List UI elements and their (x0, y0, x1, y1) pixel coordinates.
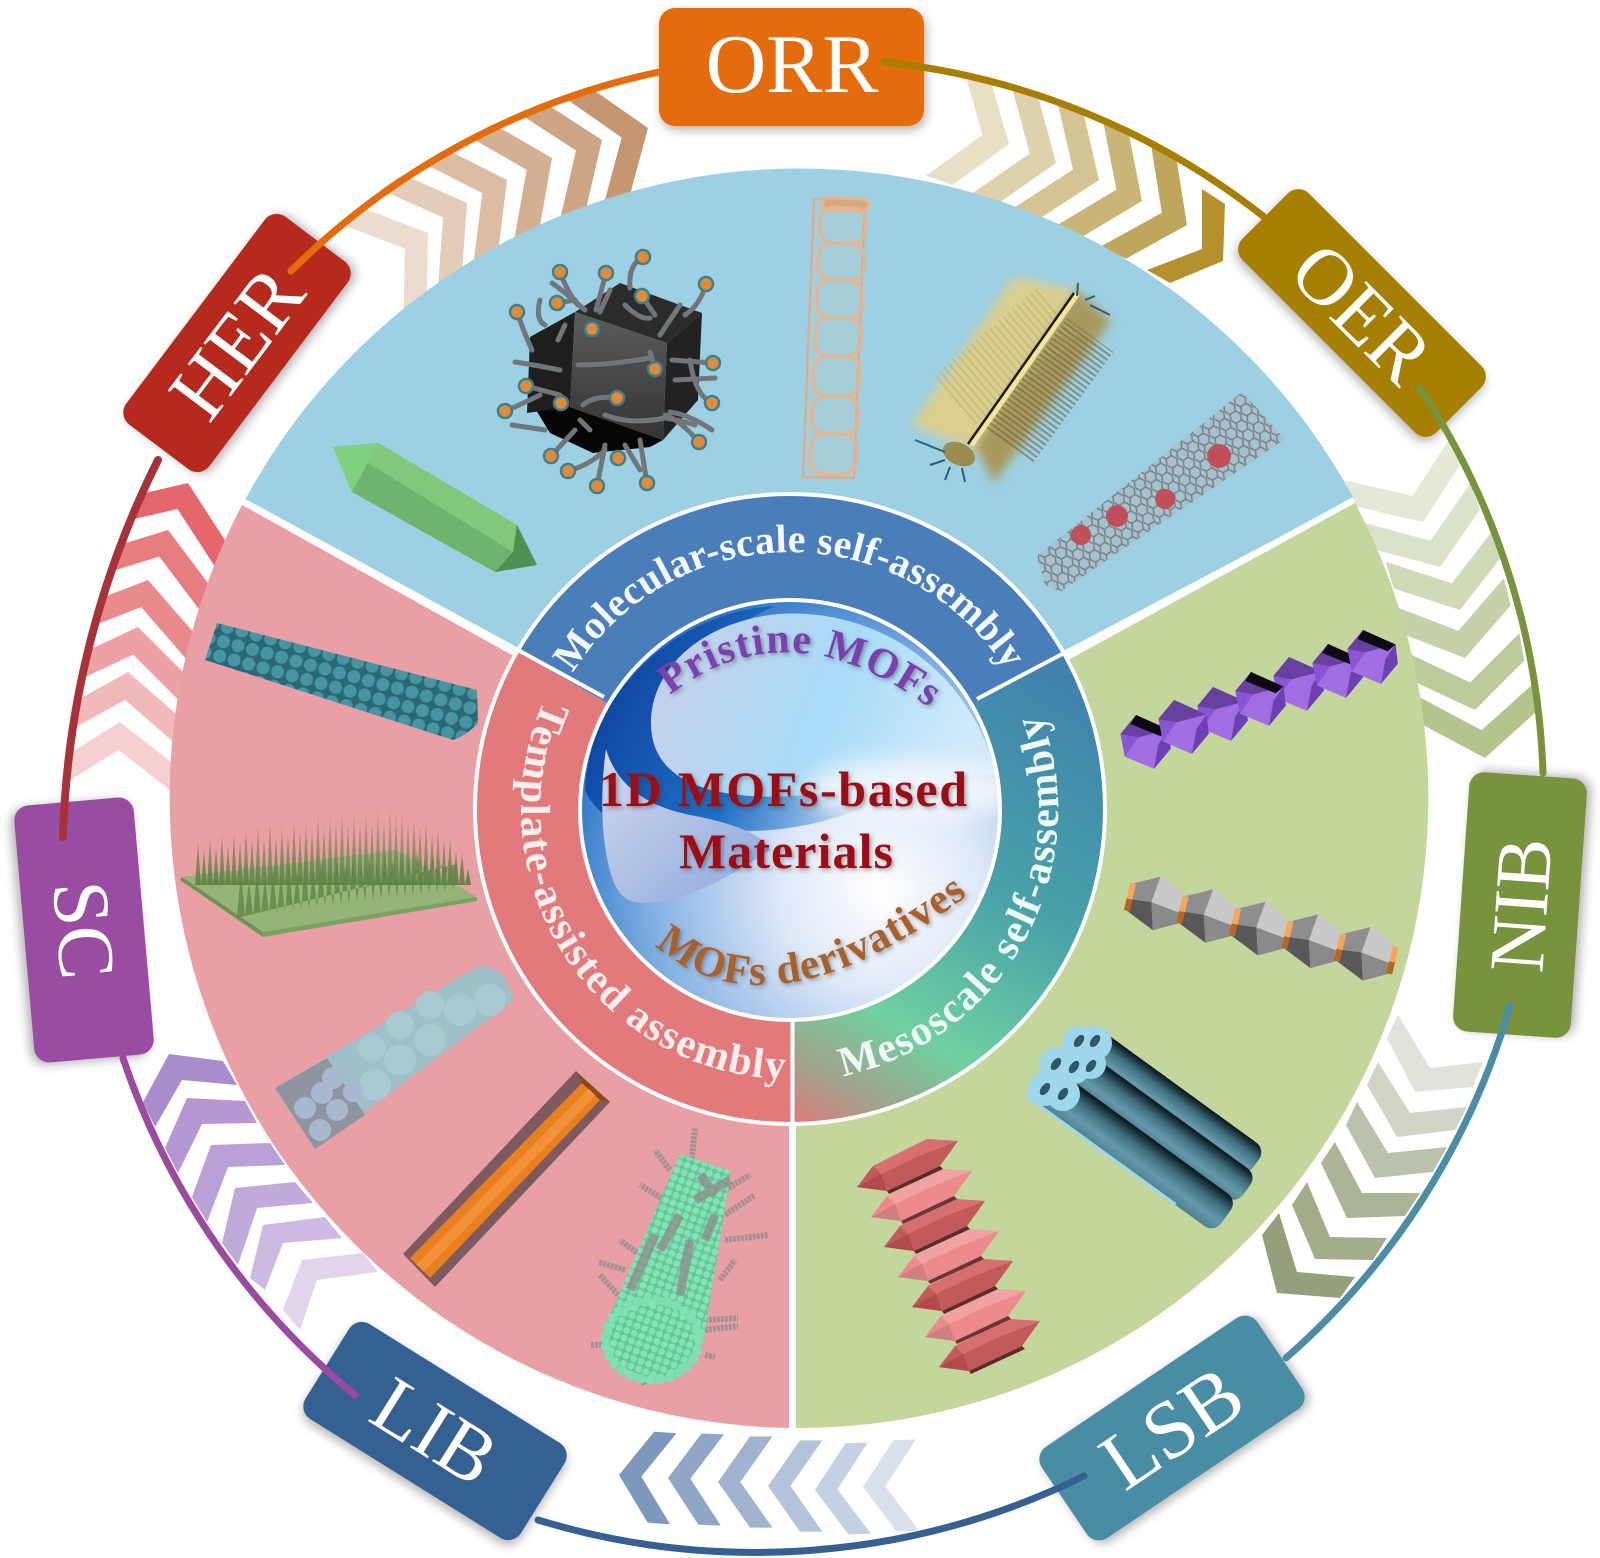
structure: hollow tube with cells (803, 197, 869, 478)
chevrons: SC to HER (70, 483, 225, 790)
category box: HER: HER (151, 250, 322, 436)
category box: SC (13, 796, 155, 1064)
swirl: fading glow at the right (805, 760, 1025, 820)
arc: LIB to SC (123, 1058, 355, 1395)
structure: teal particle tube (205, 623, 478, 740)
arc: NIB to LSB (1286, 1006, 1510, 1358)
title line 1: 1D MOFs-based (599, 761, 967, 817)
structure: capsule filled with spheres (275, 966, 514, 1149)
category box: ORR: ORR (706, 18, 878, 111)
ring sector: mesoscale self-assembly (790, 653, 1105, 1124)
core label: MOFs derivatives: MOFs derivatives (655, 881, 970, 990)
chevrons: LSB to LIB (616, 1430, 919, 1536)
ring label: Mesoscale self-assembly: Mesoscale self-assembly (836, 720, 1058, 1076)
arc: HER to ORR (291, 72, 659, 271)
ring label: Template-assisted assembly: Template-assisted assembly (512, 706, 786, 1088)
category box: ORR (659, 8, 924, 126)
category box: OER: OER (1274, 226, 1449, 402)
swirl: dark blue band (585, 606, 870, 831)
category box: OER (1232, 183, 1492, 443)
swirl: upper light lobe (651, 613, 996, 797)
polyhedron (527, 283, 702, 453)
ring label: Molecular-scale self-assembly: Molecular-scale self-assembly (552, 524, 1022, 672)
category box: LSB (1033, 1310, 1311, 1546)
central circle (580, 600, 1025, 1020)
hairs (505, 257, 715, 486)
structure: carbon nanotube with nanoparticles (1037, 392, 1285, 592)
structure: green prism (333, 443, 537, 572)
category box: NIB: NIB (1472, 835, 1569, 975)
hair tips (498, 250, 720, 493)
structure: spike array on a green plate (180, 804, 477, 937)
structure: purple cube chain (1120, 630, 1398, 769)
ring sector dividers (245, 500, 1354, 1430)
core rim (580, 600, 1000, 1020)
chevrons: ORR to OER (926, 68, 1225, 283)
structure: grey bead chain with orange bands (1121, 870, 1402, 987)
category box: SC: SC (35, 878, 131, 983)
panel: molecular-scale sector (blue) (245, 168, 1353, 805)
structure: yellow brush nanorod (911, 277, 1111, 483)
arc: OER to NIB (1420, 388, 1543, 773)
core label: Pristine MOFs: Pristine MOFs (654, 625, 942, 710)
chevrons: OER to NIB (1345, 438, 1542, 765)
arc: ORR to OER (884, 62, 1263, 216)
structure: orange core tube (403, 1071, 610, 1287)
structure: stacked red prisms (857, 1139, 1040, 1374)
category box: HER (117, 208, 357, 478)
structure: green nanosphere tube with grey rods (590, 1128, 768, 1385)
middle ring (245, 493, 1354, 1430)
category box: LIB (298, 1316, 572, 1546)
ring sector: template-assisted assembly (475, 651, 790, 1124)
panel: template-assisted sector (pink) (170, 505, 789, 1428)
chevrons: NIB to LSB (1262, 1015, 1483, 1298)
swirl: lower left pocket (602, 749, 770, 903)
ring outline (475, 494, 1105, 1124)
category box: LIB: LIB (357, 1360, 512, 1503)
chevrons: LIB to SC (143, 1054, 378, 1330)
ring sector: molecular-scale self-assembly (517, 493, 1064, 809)
arc: SC to HER (63, 460, 158, 837)
chevrons: HER to ORR (346, 92, 648, 308)
structure: hollow cylinder bundle (1025, 1017, 1273, 1234)
category box: LSB: LSB (1084, 1348, 1260, 1507)
arc: LSB to LIB (538, 1476, 1084, 1552)
panel: mesoscale sector (green) (796, 503, 1428, 1428)
core title (599, 761, 967, 879)
category box: NIB (1452, 771, 1588, 1039)
core disc (580, 600, 1000, 1020)
structure: black polyhedron with hairs (498, 250, 720, 493)
title line 2: Materials (679, 823, 893, 879)
